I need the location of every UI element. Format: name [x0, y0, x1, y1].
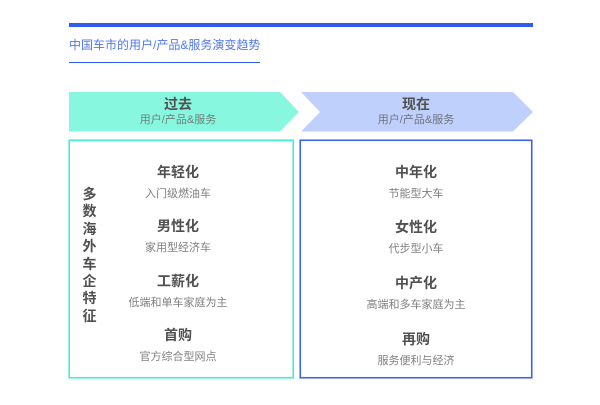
vertical label: 多	[82, 186, 96, 202]
past item: 男性化	[145, 218, 211, 254]
vertical label: 数	[82, 203, 96, 219]
arrow subheading: present: 用户/产品&服务	[378, 114, 454, 126]
vertical label: 特	[82, 290, 96, 306]
vertical label: 征	[82, 308, 96, 324]
past item: 年轻化	[145, 164, 211, 200]
text: 低端和单车家庭为主	[128, 297, 228, 309]
arrow heading: present: 现在	[402, 96, 430, 112]
arrow: past	[69, 92, 299, 132]
arrow subheading: past: 用户/产品&服务	[140, 114, 216, 126]
text: 服务便利与经济	[378, 355, 454, 367]
text: 年轻化	[157, 164, 199, 180]
text: 工薪化	[157, 273, 199, 289]
present item: 再购	[378, 331, 454, 367]
arrow: present	[301, 92, 533, 132]
present item: 中年化	[388, 164, 444, 200]
title underline	[69, 62, 260, 63]
text: 入门级燃油车	[145, 188, 211, 200]
text: 首购	[164, 327, 192, 343]
text: 中产化	[395, 275, 437, 291]
text: 高端和多车家庭为主	[366, 299, 466, 311]
past item: 首购	[140, 327, 216, 363]
text: 代步型小车	[388, 243, 444, 255]
top accent bar	[69, 23, 533, 27]
vertical label	[82, 186, 96, 324]
text: 女性化	[395, 219, 437, 235]
panel: present	[299, 139, 533, 379]
text: 再购	[402, 331, 430, 347]
text: 节能型大车	[388, 188, 444, 200]
text: 官方综合型网点	[140, 351, 216, 363]
panel: past	[68, 139, 294, 379]
present item: 女性化	[388, 219, 444, 255]
vertical label: 外	[82, 238, 96, 254]
title: 中国车市的用户/产品&服务演变趋势	[69, 38, 260, 52]
past item: 工薪化	[128, 273, 228, 309]
text: 中年化	[395, 164, 437, 180]
text: 家用型经济车	[145, 242, 211, 254]
text: 男性化	[157, 218, 199, 234]
present item: 中产化	[366, 275, 466, 311]
vertical label: 车	[82, 256, 96, 272]
vertical label: 海	[82, 221, 96, 237]
arrow heading: past: 过去	[164, 96, 192, 112]
vertical label: 企	[82, 273, 96, 289]
